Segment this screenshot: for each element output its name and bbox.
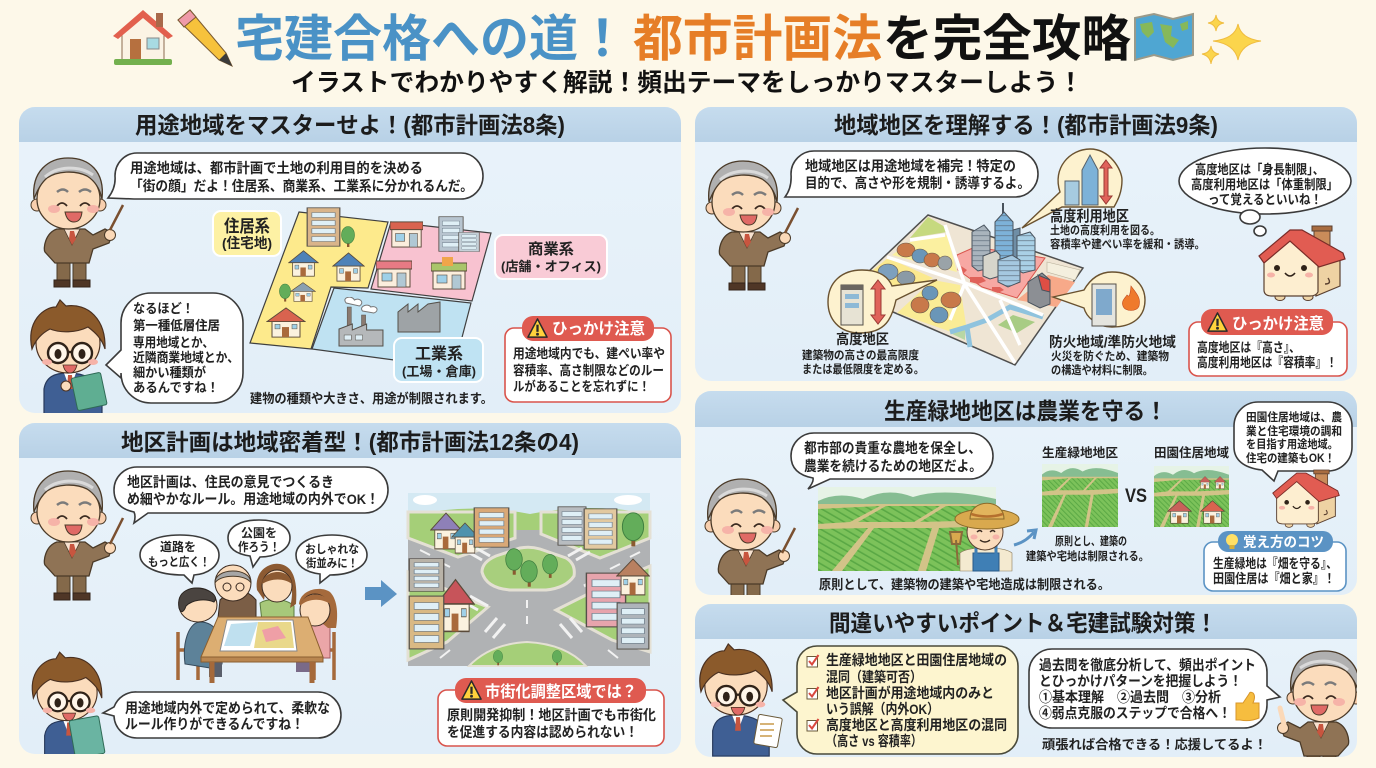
speech bubble: teacher bbox=[785, 151, 1038, 197]
illustration: residents meeting around a map table bbox=[178, 564, 337, 683]
zoning map bbox=[250, 208, 491, 368]
speech bubble: 公園: 公園を bbox=[241, 526, 277, 540]
icon: light bulb bbox=[1226, 534, 1238, 549]
speech bubble: teacher: 目的で、高さや形を規制・誘導するよ。 bbox=[805, 175, 1030, 191]
panel header bbox=[695, 107, 1357, 142]
chairs bbox=[178, 632, 334, 680]
caption: 頑張れば合格できる！応援してるよ！ bbox=[1042, 737, 1267, 752]
label: 住居系: (住宅地) bbox=[222, 235, 272, 251]
map base bbox=[847, 215, 1083, 365]
heading: 生産緑地地区は農業を守る！ bbox=[884, 398, 1167, 424]
speech bubble: student: 細かい種類が bbox=[133, 365, 206, 380]
VS label: VS bbox=[1125, 486, 1147, 507]
speech bubble: teacher bbox=[791, 433, 993, 489]
title part 2: 都市計画法 bbox=[633, 11, 882, 67]
callout: 防火地域: 防火地域/準防火地域 bbox=[1049, 334, 1176, 350]
check item 2: 地区計画が用途地域内のみと bbox=[826, 685, 994, 701]
speech bubble: mascot bbox=[1234, 402, 1352, 481]
panel body bbox=[19, 107, 681, 413]
callout: 高度地区: 高度地区 bbox=[836, 331, 889, 347]
advice bubble: 過去問を徹底分析して、頻出ポイント bbox=[1039, 657, 1256, 673]
panel: 生産緑地地区 bbox=[695, 391, 1357, 608]
panel header bbox=[19, 423, 681, 458]
comparison: 生産緑地地区 bbox=[1042, 445, 1118, 527]
thought bubble: って覚えるといいね！ bbox=[1208, 192, 1322, 207]
student character bbox=[700, 644, 782, 756]
red arrows bbox=[961, 266, 1004, 293]
student character bbox=[32, 652, 105, 760]
panel: 間違いやすいポイント bbox=[695, 604, 1362, 768]
thought bubble bbox=[1179, 148, 1351, 236]
label: 住居系 bbox=[213, 211, 281, 256]
buildings bbox=[267, 208, 479, 346]
arrow bbox=[365, 580, 397, 607]
speech bubble: 道路 bbox=[140, 535, 219, 583]
high-use district bbox=[957, 247, 1045, 298]
callout: 高度利用地区: 高度利用地区 bbox=[1050, 207, 1129, 225]
roads bbox=[887, 225, 1043, 363]
greens and river bbox=[998, 315, 1035, 333]
speech bubble: mascot: 田園住居地域は、農 bbox=[1246, 410, 1342, 424]
heading: 間違いやすいポイント＆宅建試験対策！ bbox=[829, 610, 1217, 636]
student character bbox=[31, 300, 107, 415]
speech bubble: teacher: 地域地区は用途地域を補完！特定の bbox=[805, 158, 1016, 174]
speech bubble: teacher: 「街の顔」だよ！住居系、商業系、工業系に分かれるんだ。 bbox=[130, 178, 473, 194]
fire district bbox=[1017, 275, 1075, 307]
speech bubble: 公園: 作ろう！ bbox=[238, 539, 280, 554]
panel body bbox=[695, 107, 1357, 381]
label: 商業系: 商業系 bbox=[528, 240, 574, 258]
panel header bbox=[695, 391, 1357, 427]
illustration: town with roads bbox=[408, 493, 650, 666]
heading: 用途地域をマスターせよ！(都市計画法8条) bbox=[135, 112, 565, 138]
farmer bbox=[950, 503, 1019, 571]
callout: warning: 容積率、高さ制限などのルー bbox=[513, 363, 664, 378]
small houses bbox=[878, 243, 961, 323]
callout: warning: 高度利用地区は『容積率』！ bbox=[1197, 355, 1337, 370]
check item 1 bbox=[807, 652, 1007, 685]
icon: thumbs up bbox=[1236, 692, 1259, 721]
subtitle: イラストでわかりやすく解説！頻出テーマをしっかりマスターしよう！ bbox=[291, 69, 1083, 97]
comparison: 田園住居地域: 田園住居地域 bbox=[1154, 445, 1229, 460]
panel: 地区計画 bbox=[19, 423, 681, 760]
check item 1: 混同（建築可否） bbox=[826, 669, 922, 685]
speech bubble: student bbox=[103, 692, 341, 738]
note text bbox=[1026, 534, 1149, 563]
speech bubble: mascot: を目指す用途地域。 bbox=[1246, 437, 1338, 451]
label: 工業系: (工場・倉庫) bbox=[402, 364, 476, 379]
icon: pencil emoji bbox=[178, 10, 232, 66]
teacher character bbox=[31, 471, 123, 600]
speech bubble: student: ルール作りができるんですね！ bbox=[125, 716, 304, 732]
panel header bbox=[695, 604, 1357, 639]
callout: 防火地域: の構造や材料に制限。 bbox=[1051, 363, 1153, 377]
teacher character bbox=[706, 161, 798, 290]
teacher character bbox=[1277, 650, 1357, 757]
title part 3: を完全攻略 bbox=[883, 11, 1131, 67]
thought bubble: 高度利用地区は「体重制限」 bbox=[1191, 177, 1338, 192]
speech bubble: 街並み bbox=[296, 535, 367, 583]
speech bubble: 街並み: おしゃれな bbox=[305, 543, 359, 556]
zone: commercial bbox=[371, 222, 491, 301]
caption: 建物の種類や大きさ、用途が制限されます。 bbox=[250, 391, 493, 406]
advice bubble: ④弱点克服のステップで合格へ！ bbox=[1039, 705, 1231, 721]
callout: memory tip bbox=[1204, 531, 1346, 591]
callout: 高度地区: 建築物の高さの最高限度 bbox=[802, 348, 919, 362]
speech bubble: teacher: 用途地域は、都市計画で土地の利用目的を決める bbox=[130, 160, 423, 176]
speech bubble: 公園 bbox=[228, 520, 290, 567]
title bbox=[113, 10, 1261, 67]
title part 1: 宅建合格への道！ bbox=[235, 11, 627, 67]
icon: house emoji bbox=[113, 10, 173, 65]
mascot house bbox=[1273, 470, 1339, 527]
heading: 地区計画は地域密着型！(都市計画法12条の4) bbox=[121, 429, 579, 455]
speech bubble: student: 専用地域とか、 bbox=[133, 335, 214, 350]
callout: 防火地域 bbox=[1049, 272, 1176, 377]
speech bubble: teacher: 都市部の貴重な農地を保全し、 bbox=[804, 440, 981, 456]
check item 3: 高度地区と高度利用地区の混同 bbox=[826, 717, 1007, 733]
panel body bbox=[19, 423, 681, 754]
callout: 高度利用地区 bbox=[1022, 149, 1205, 251]
teacher character bbox=[31, 158, 123, 287]
speech bubble: teacher bbox=[108, 153, 483, 199]
speech bubble: teacher: め細やかなルール。用途地域の内外でOK！ bbox=[127, 491, 379, 507]
callout: warning: 用途地域内でも、建ぺい率や bbox=[513, 346, 665, 361]
check item 3 bbox=[807, 717, 1007, 749]
mascot house bbox=[1259, 226, 1345, 300]
skyscrapers bbox=[972, 203, 1050, 308]
heading: 地域地区を理解する！(都市計画法9条) bbox=[834, 112, 1218, 138]
icon: map emoji bbox=[1135, 14, 1193, 60]
speech bubble: student: 第一種低層住居 bbox=[133, 318, 220, 333]
check item 1: 生産緑地地区と田園住居地域の bbox=[826, 652, 1007, 668]
city map bbox=[847, 203, 1083, 365]
callout: warning: 市街化調整区域では？ bbox=[485, 682, 637, 701]
advice bubble bbox=[1029, 649, 1280, 728]
speech bubble: 街並み: 街並みに！ bbox=[306, 556, 358, 570]
advice bubble: ①基本理解 ②過去問 ③分析 bbox=[1039, 689, 1221, 705]
check item 2: いう誤解（内外OK） bbox=[826, 701, 939, 717]
speech bubble: teacher: 農業を続けるための地区だよ。 bbox=[804, 458, 982, 474]
callout: warning: を促進する内容は認められない！ bbox=[447, 724, 638, 740]
panel header bbox=[19, 107, 681, 142]
panel: 用途地域 bbox=[19, 107, 681, 415]
callout: 高度利用地区: 容積率や建ぺい率を緩和・誘導。 bbox=[1050, 237, 1205, 251]
speech bubble: 道路: もっと広く！ bbox=[148, 555, 210, 569]
callout: memory tip: 生産緑地は『畑を守る』、 bbox=[1213, 556, 1337, 571]
panel body bbox=[695, 604, 1357, 757]
icon: sparkles emoji bbox=[1202, 15, 1261, 64]
speech bubble: 道路: 道路を bbox=[160, 539, 196, 554]
callout: warning: ひっかけ注意 bbox=[1232, 315, 1324, 333]
check item 3: （高さ vs 容積率） bbox=[826, 733, 922, 749]
caption: 原則として、建築物の建築や宅地造成は制限される。 bbox=[819, 577, 1110, 592]
note text: 原則とし、建築の bbox=[1055, 534, 1127, 548]
callout: warning: 原則開発抑制！地区計画でも市街化 bbox=[447, 707, 656, 723]
label: 商業系 bbox=[495, 235, 607, 279]
callout: 高度地区: または最低限度を定める。 bbox=[802, 362, 924, 376]
callout: warning bbox=[1189, 309, 1347, 376]
note text: 建築や宅地は制限される。 bbox=[1026, 549, 1149, 563]
panel: 地域地区 bbox=[695, 107, 1357, 381]
callout: memory tip: 田園住居は『畑と家』！ bbox=[1213, 571, 1335, 586]
label: 商業系: (店舗・オフィス) bbox=[501, 259, 601, 274]
speech bubble: mascot: 住宅の建築もOK！ bbox=[1246, 451, 1335, 465]
arrow bbox=[1014, 530, 1036, 545]
callout: warning: ルがあることを忘れずに！ bbox=[513, 379, 650, 394]
callout: 高度地区 bbox=[802, 270, 937, 376]
speech bubble: student: あるんですね！ bbox=[133, 380, 219, 395]
callout: memory tip: 覚え方のコツ bbox=[1243, 534, 1324, 550]
label: 工業系 bbox=[394, 338, 483, 382]
callout: warning: ひっかけ注意 bbox=[552, 320, 645, 338]
callout: warning bbox=[438, 678, 664, 746]
label: 住居系: 住居系 bbox=[224, 217, 270, 236]
residential zones bbox=[910, 217, 947, 238]
farm illustration bbox=[818, 487, 1019, 571]
checklist bubble bbox=[783, 646, 1018, 754]
speech bubble: mascot: 業と住宅環境の調和 bbox=[1246, 424, 1342, 438]
advice bubble: とひっかけパターンを把握しよう！ bbox=[1039, 673, 1242, 689]
speech bubble: student: 近隣商業地域とか、 bbox=[133, 350, 239, 365]
comparison: 生産緑地地区: 生産緑地地区 bbox=[1042, 445, 1118, 460]
zone: residential bbox=[250, 212, 388, 349]
speech bubble: teacher bbox=[114, 467, 388, 523]
label: 工業系: 工業系 bbox=[415, 345, 463, 363]
comparison: 田園住居地域 bbox=[1154, 445, 1229, 527]
callout: 高度利用地区: 土地の高度利用を図る。 bbox=[1050, 223, 1160, 237]
speech bubble: student bbox=[106, 293, 243, 403]
table bbox=[201, 617, 323, 657]
thought bubble: 高度地区は「身長制限」、 bbox=[1195, 162, 1324, 177]
speech bubble: student: なるほど！ bbox=[133, 301, 194, 316]
panel body bbox=[695, 391, 1357, 595]
check item 2 bbox=[807, 685, 994, 717]
callout: warning bbox=[505, 316, 671, 402]
callout: warning: 高度地区は『高さ』、 bbox=[1197, 340, 1300, 355]
speech bubble: student: 用途地域内外で定められて、柔軟な bbox=[125, 700, 330, 716]
callout: 防火地域: 火災を防ぐため、建築物 bbox=[1051, 349, 1169, 363]
teacher character bbox=[705, 479, 795, 608]
speech bubble: teacher: 地区計画は、住民の意見でつくるき bbox=[127, 474, 334, 490]
zone: industrial bbox=[312, 288, 471, 368]
